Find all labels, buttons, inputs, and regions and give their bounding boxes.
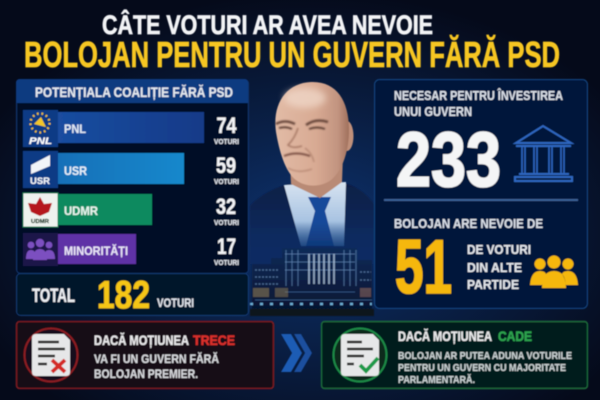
coalition heading: POTENȚIALA COALIȚIE FĂRĂ PSD [35, 85, 233, 100]
row: USR: 59 [216, 153, 236, 178]
text: motion passes: BOLOJAN PREMIER. [94, 367, 198, 381]
text: motion fails: BOLOJAN AR PUTEA ADUNA VOTURILE [398, 350, 572, 362]
text: motion fails: DACĂ MOȚIUNEA [398, 328, 492, 344]
jacket [250, 184, 374, 262]
row: Minorități: VOTURI [214, 258, 239, 267]
row: Minorități [23, 233, 239, 267]
panel: total: 182 [97, 274, 150, 317]
icon: rejected document [24, 328, 78, 382]
panel: total: VOTURI [157, 296, 194, 310]
logo: USR [23, 151, 58, 188]
logo: minorities [23, 233, 58, 266]
logo: UDMR: UDMR [31, 219, 49, 225]
logo: PNL: PNL [29, 136, 52, 147]
row: UDMR: UDMR [64, 206, 99, 218]
shirt [284, 182, 346, 246]
head [275, 82, 349, 186]
text: motion passes: TRECE [193, 332, 235, 348]
text: motion fails [398, 328, 572, 386]
row: PNL: PNL [64, 124, 86, 136]
text: motion fails: PARLAMENTARĂ. [398, 373, 475, 386]
coalition heading [16, 79, 248, 103]
logo: USR: USR [30, 176, 51, 186]
text: motion passes: DACĂ MOȚIUNEA [94, 332, 189, 348]
text: votes from other parties [467, 242, 531, 292]
panel: motion fails [322, 322, 588, 388]
photo: politician with parliament palace [250, 82, 374, 316]
text: investiture: NECESAR PENTRU ÎNVESTIREA [394, 88, 564, 103]
tie [306, 197, 334, 246]
icon: people [530, 256, 578, 288]
row: UDMR: 32 [216, 194, 236, 219]
text: Bolojan needs: BOLOJAN ARE NEVOIE DE [394, 216, 543, 231]
row: Minorități: MINORITĂȚI [64, 245, 128, 258]
ear [340, 121, 354, 151]
text: motion fails: CADE [498, 328, 532, 344]
panel: total [16, 274, 248, 317]
arrow: chevrons [281, 334, 312, 372]
text: investiture: UNUI GUVERN [394, 104, 472, 119]
text: votes from other parties: DE VOTURI [467, 242, 531, 257]
row: UDMR [23, 193, 239, 227]
number: 233: 233 [396, 117, 501, 203]
text: votes from other parties: DIN ALTE [467, 260, 522, 275]
facial features [276, 121, 328, 171]
row: USR: VOTURI [214, 177, 239, 186]
text: investiture [394, 88, 564, 119]
row: USR [23, 151, 239, 188]
logo: UDMR [23, 193, 58, 227]
row: PNL [23, 110, 239, 147]
forehead highlight [284, 88, 326, 108]
row: PNL: VOTURI [214, 137, 239, 146]
row: PNL: 74 [216, 113, 237, 138]
parliament palace [250, 248, 374, 316]
row: Minorități: 17 [217, 234, 236, 259]
panel: coalition [16, 79, 248, 274]
text: motion passes [94, 332, 235, 381]
row: UDMR: VOTURI [214, 218, 239, 227]
panel: total: TOTAL [32, 286, 75, 307]
panel: motion passes [16, 322, 274, 388]
icon: parliament building [515, 126, 572, 181]
panel: votes needed [374, 80, 588, 310]
text: motion fails: PENTRU UN GUVERN CU MAJORITATE [398, 362, 566, 374]
lower fade [250, 222, 374, 264]
title: CÂTE VOTURI AR AVEA NEVOIE [102, 9, 433, 40]
text: motion passes: VA FI UN GUVERN FĂRĂ [94, 351, 219, 366]
neck [290, 155, 343, 198]
row: USR: USR [64, 166, 88, 178]
number: 51: 51 [395, 225, 452, 310]
logo: PNL [23, 110, 58, 147]
title [24, 9, 560, 75]
icon: approved document [334, 328, 386, 382]
text: votes from other parties: PARTIDE [467, 277, 519, 292]
